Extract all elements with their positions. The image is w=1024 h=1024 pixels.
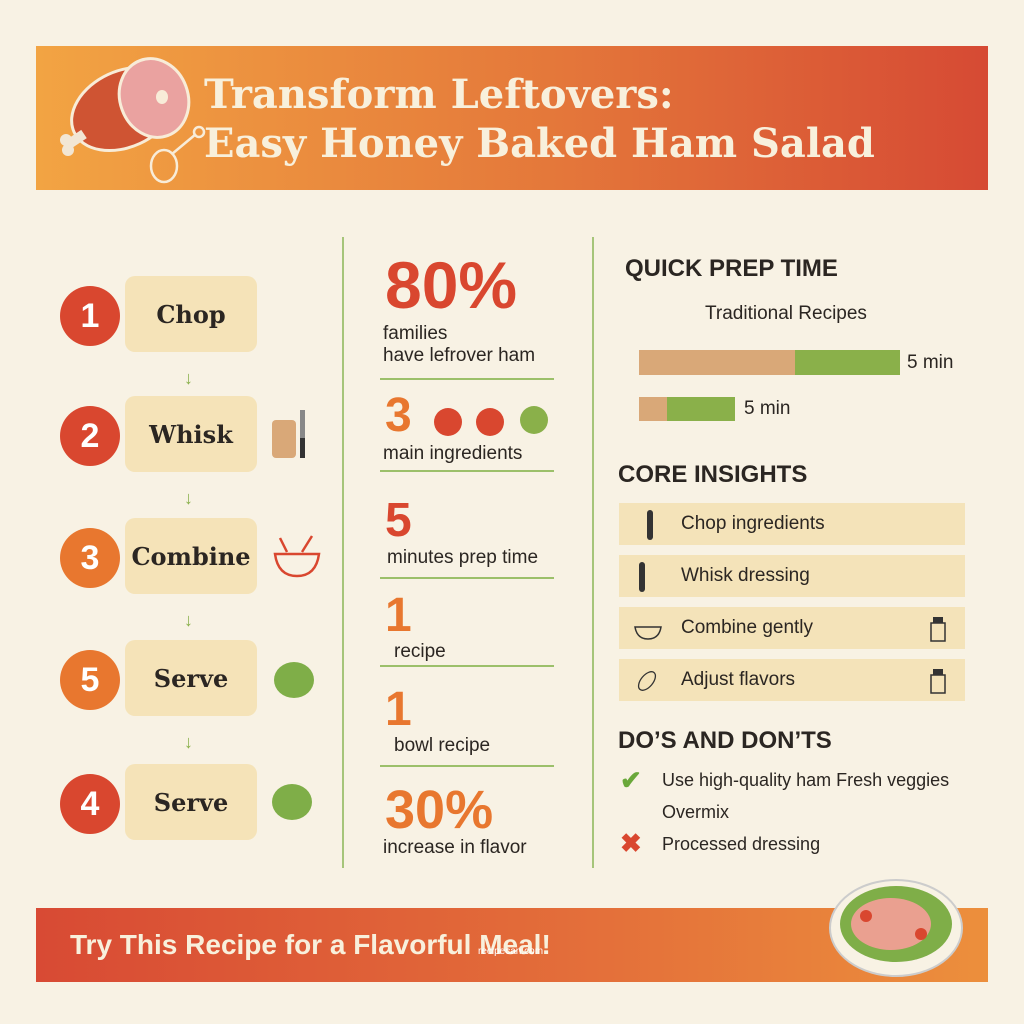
bar chart: Traditional Recipes (705, 303, 867, 324)
step 3 (60, 518, 320, 594)
text: 30% (385, 780, 493, 840)
panel: steps: ↓ (184, 488, 193, 508)
text: families (383, 323, 447, 344)
icon: salad bowl (829, 879, 963, 977)
title: Easy Honey Baked Ham Salad (204, 120, 875, 167)
panel: steps: Chop (156, 300, 226, 329)
title (204, 71, 875, 167)
insight rows: Whisk dressing (681, 565, 810, 586)
text: minutes prep time (387, 547, 538, 568)
panel: steps: 2 (81, 417, 99, 455)
footer banner: Try This Recipe for a Flavorful Meal! (70, 929, 551, 960)
panel: steps: ↓ (184, 368, 193, 388)
dos list: Overmix (662, 802, 729, 822)
text: 1 (385, 683, 412, 736)
insight rows: Combine gently (681, 617, 813, 638)
insight rows (619, 503, 965, 701)
dividers (342, 237, 344, 868)
panel: steps: ↓ (184, 732, 193, 752)
panel: steps (60, 276, 320, 840)
panel: steps: 5 (81, 661, 99, 699)
text: increase in flavor (383, 837, 527, 858)
panel: steps: Combine (131, 542, 251, 571)
title: Transform Leftovers: (204, 71, 674, 118)
text: 3 (385, 389, 412, 442)
panel: steps: ↓ (184, 610, 193, 630)
panel: steps: 4 (81, 785, 99, 823)
footer banner: recipecan.com (478, 946, 543, 957)
panel: steps: Serve (154, 664, 228, 693)
heading: quick prep time: QUICK PREP TIME (625, 255, 838, 282)
text: 5 (385, 494, 412, 547)
heading: dos and donts: DO’S AND DON’TS (618, 727, 832, 754)
panel: steps: 1 (81, 297, 99, 335)
text: recipe (394, 641, 446, 662)
step 1 (60, 276, 257, 352)
heading: core insights: CORE INSIGHTS (618, 461, 807, 488)
panel: stats (370, 245, 570, 865)
step 4 (60, 764, 312, 840)
dos list: Use high-quality ham Fresh veggies (662, 770, 949, 790)
icon: ham (60, 57, 206, 184)
panel: steps: Serve (154, 788, 228, 817)
text: bowl recipe (394, 735, 490, 756)
footer banner (36, 908, 988, 982)
insight rows: Adjust flavors (681, 669, 795, 690)
header banner (36, 46, 988, 190)
text: have lefrover ham (383, 345, 535, 366)
bar chart: 5 min (744, 398, 790, 419)
text: 1 (385, 589, 412, 642)
text: 80% (385, 248, 517, 322)
bar chart: 5 min (907, 352, 953, 373)
panel: steps: Whisk (149, 420, 233, 449)
text: main ingredients (383, 443, 522, 464)
dos list: ✔ (620, 765, 642, 795)
step 2 (60, 396, 305, 472)
dos list (620, 765, 949, 858)
dos list: ✖ (620, 828, 642, 858)
dos list: Processed dressing (662, 834, 820, 854)
panel: steps: 3 (81, 539, 99, 577)
bar chart (639, 303, 953, 421)
step 5 (60, 640, 314, 716)
insight rows: Chop ingredients (681, 513, 825, 534)
